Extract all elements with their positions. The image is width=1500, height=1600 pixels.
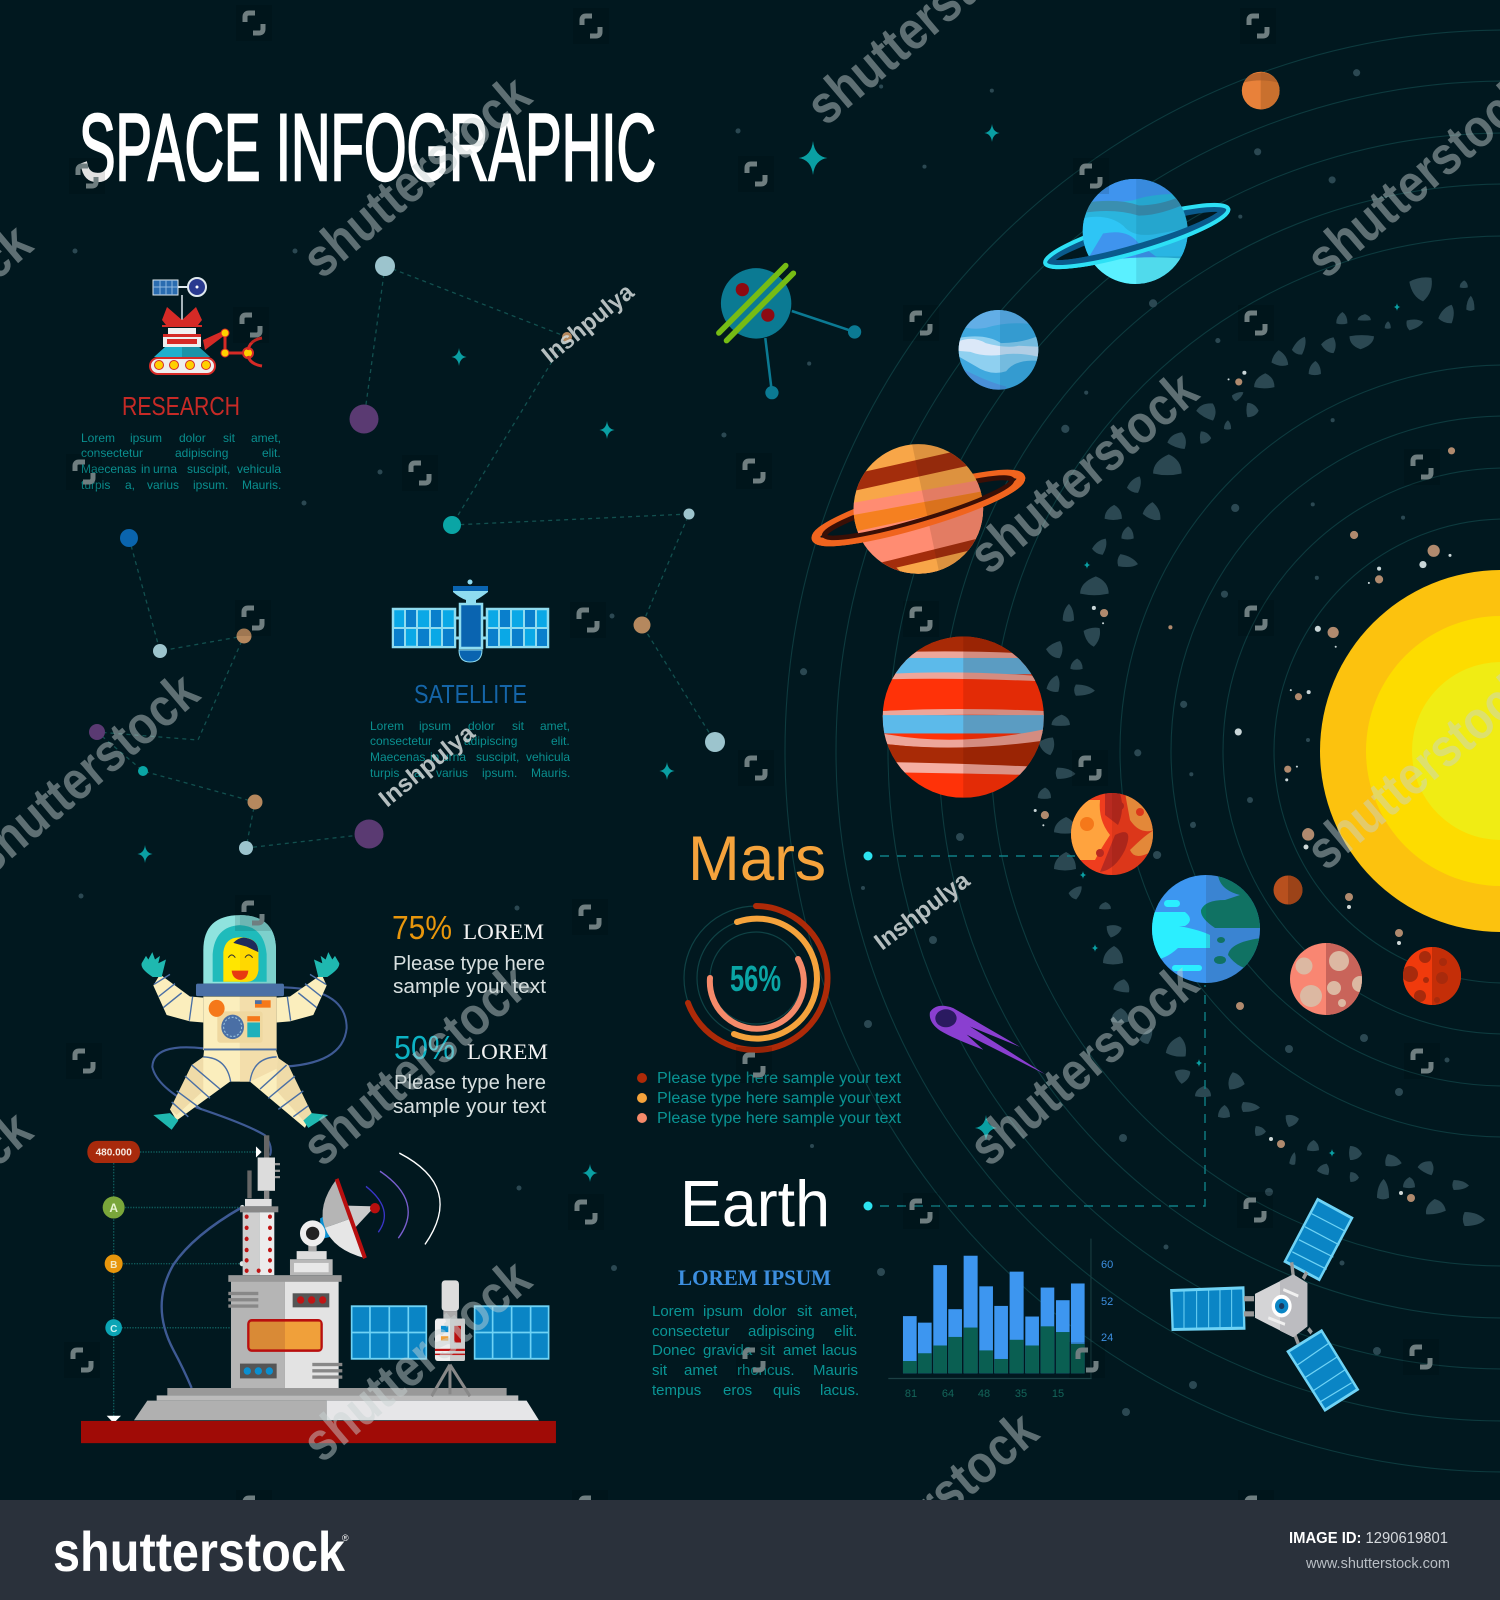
text block: satellite: in [430,750,439,764]
text block: satellite: sit [512,719,525,733]
control building [228,1275,342,1389]
text block: research: dolor [179,431,206,445]
panel: upper solar system scaled group [719,69,1474,858]
text block: research: elit. [262,446,281,460]
heading: satellite: SATELLITE [414,679,527,709]
text block: research: a, [125,478,135,492]
text block: research: suscipit, [187,462,230,476]
ruler labels: A [109,1201,118,1215]
text block: research: varius [147,478,179,492]
callout line: mars [864,852,1075,860]
text block: satellite: elit. [551,734,570,748]
text block: earth: sit [652,1362,668,1379]
stat: 75 percent: LOREM [463,919,544,944]
text block: research: Maecenas [81,462,136,476]
text block: satellite: suscipit, [476,750,519,764]
text block: satellite: a, [414,766,424,780]
callout line: earth [864,985,1205,1210]
footer logo: shutterstock [53,1520,346,1583]
heading: research: RESEARCH [122,391,240,421]
text block: earth: quis [773,1382,801,1399]
legend: Please type here sample your text [657,1090,902,1107]
text block: satellite: Lorem [370,719,404,733]
text block: earth: elit. [834,1323,857,1340]
text block: earth: Lorem [652,1303,695,1320]
legend: Please type here sample your text [657,1070,902,1087]
stat: 75 percent [392,909,546,998]
text block: research: ipsum. [193,478,228,492]
solar panels [352,1306,549,1359]
text block: earth: ipsum [703,1303,743,1320]
bar chart: 24 [1101,1332,1113,1344]
ruler scale [87,1141,262,1423]
asteroid belt upper [1038,276,1474,831]
tan and white dust [1236,828,1415,1202]
text block: satellite: amet, [540,719,570,733]
text block: earth: amet, [820,1303,858,1320]
text block: satellite: turpis [370,766,399,780]
legend [637,1070,902,1127]
text block: earth: sit [760,1342,776,1359]
dust dots [721,69,1455,858]
text block: research: adipiscing [175,446,228,460]
text block: research: urna [153,462,177,476]
text block: earth: tempus [652,1382,701,1399]
text block: earth: amet [684,1362,718,1379]
text block: satellite: vehicula [526,750,570,764]
watermarks: shutterstock: shutterstock [291,63,543,289]
text block: earth: dolor [753,1303,786,1320]
stat: 50 percent: LOREM [467,1039,548,1064]
stat: 50 percent: sample your text [393,1096,546,1118]
bar chart: 52 [1101,1296,1113,1308]
text block: earth: Donec [652,1342,696,1359]
planet: small pale blue [958,309,1041,392]
planet: blue ringed [1041,179,1233,284]
planet: red cratered [1402,947,1461,1005]
astronaut figure [141,915,339,1130]
stat: 50 percent: 50% [394,1029,455,1066]
radar dish [290,1153,440,1275]
watermarks: contributor: Inshpulya [537,278,640,369]
illustration: astronaut and ground station [81,915,556,1443]
blue cable [162,1207,242,1388]
stat: 75 percent: sample your text [393,976,546,998]
ruler labels [96,1148,132,1335]
planet: saturn orange [811,443,1026,575]
text block: earth: lacus [822,1342,857,1359]
background space dust [72,128,1450,1416]
icon: blue satellite [393,580,548,662]
text block: earth: Mauris [813,1362,858,1379]
planet: small orange [1242,72,1280,109]
legend: Please type here sample your text [657,1110,902,1127]
ruler labels: B [110,1260,117,1271]
icon: research rover [150,278,262,374]
text block: earth: lacus. [820,1382,859,1399]
heading: lorem ipsum: LOREM IPSUM [678,1265,831,1290]
bar chart [888,1239,1113,1400]
title: SPACE INFOGRAPHIC [79,95,656,201]
bar chart: 64 [942,1388,954,1400]
text block: earth: amet [783,1342,817,1359]
bar chart: 81 [905,1388,917,1400]
watermarks: shutterstock: shutterstock [958,359,1210,585]
text block: satellite: Mauris. [531,766,570,780]
footer registered mark: ® [342,1533,349,1543]
telescope [432,1280,470,1396]
ruler labels: 480.000 [96,1148,132,1158]
donut chart: 56 percent [684,906,828,1050]
text block: earth: gravida [703,1342,753,1359]
footer image id: IMAGE ID: 1290619801 [1289,1530,1448,1547]
stat: 50 percent: Please type here [394,1072,546,1094]
comet [930,1006,1045,1074]
text block: satellite: dolor [468,719,495,733]
text block: earth: sit [797,1303,813,1320]
planet: earth illustration [1152,875,1262,983]
bar chart: 35 [1015,1388,1027,1400]
tether cable [152,987,347,1156]
antenna tower [240,1135,280,1275]
text block: research: turpis [81,478,110,492]
text block: satellite: varius [436,766,468,780]
stat: 50 percent [393,1029,548,1118]
text block: satellite: urna [442,750,466,764]
watermarks: shutterstock: shutterstock [291,951,543,1177]
text block: earth: adipiscing [748,1323,815,1340]
footer bar [0,1500,1500,1600]
platform [81,1388,556,1443]
text block: research: Mauris. [242,478,281,492]
text block: earth: eros [723,1382,752,1399]
heading: Earth: Earth [680,1167,830,1240]
text block: satellite: adipiscing [464,734,517,748]
footer url: www.shutterstock.com [1305,1555,1450,1572]
text block: research: consectetur [81,446,143,460]
text block: research: vehicula [237,462,281,476]
watermarks: contributor: Inshpulya [869,866,976,956]
watermarks: shutterstock: shutterstock [291,1247,543,1473]
watermarks: contributor [374,278,976,956]
text block: earth: rhoncus. [737,1362,795,1379]
text block: research: in [141,462,150,476]
text block: satellite: Maecenas [370,750,425,764]
text block: research: ipsum [130,431,162,445]
text block: satellite: consectetur [370,734,432,748]
donut chart: 56 percent: 56% [730,958,781,999]
constellations [89,256,725,855]
bar chart: 60 [1101,1259,1113,1271]
spacer planet: green bar satellite [719,266,861,399]
sparkle stars [137,124,1400,1182]
stat: 75 percent: Please type here [393,953,545,975]
stat: 75 percent: 75% [392,909,452,946]
text block: research: amet, [251,431,281,445]
planet: salmon cratered [1290,943,1368,1015]
watermarks: contributor: Inshpulya [374,719,481,813]
text block: earth: consectetur [652,1323,730,1340]
text block: satellite: ipsum. [482,766,517,780]
text block: research: Lorem [81,431,115,445]
bar chart: 15 [1052,1388,1064,1400]
text block: satellite: ipsum [419,719,451,733]
text block: research: sit [223,431,236,445]
icon: large three-panel satellite [1171,1199,1358,1410]
planet: mars illustration [1070,792,1154,876]
asteroid belt lower [1054,817,1485,1226]
bar chart: 48 [978,1388,990,1400]
watermarks: shutterstock: shutterstock [958,951,1210,1177]
heading: Mars: Mars [688,824,826,894]
solar system orbits [785,30,1500,1472]
planet: small brown [1274,876,1302,904]
planet: jupiter red and blue [883,637,1045,798]
sun [1320,570,1500,932]
ruler labels: C [110,1324,117,1335]
